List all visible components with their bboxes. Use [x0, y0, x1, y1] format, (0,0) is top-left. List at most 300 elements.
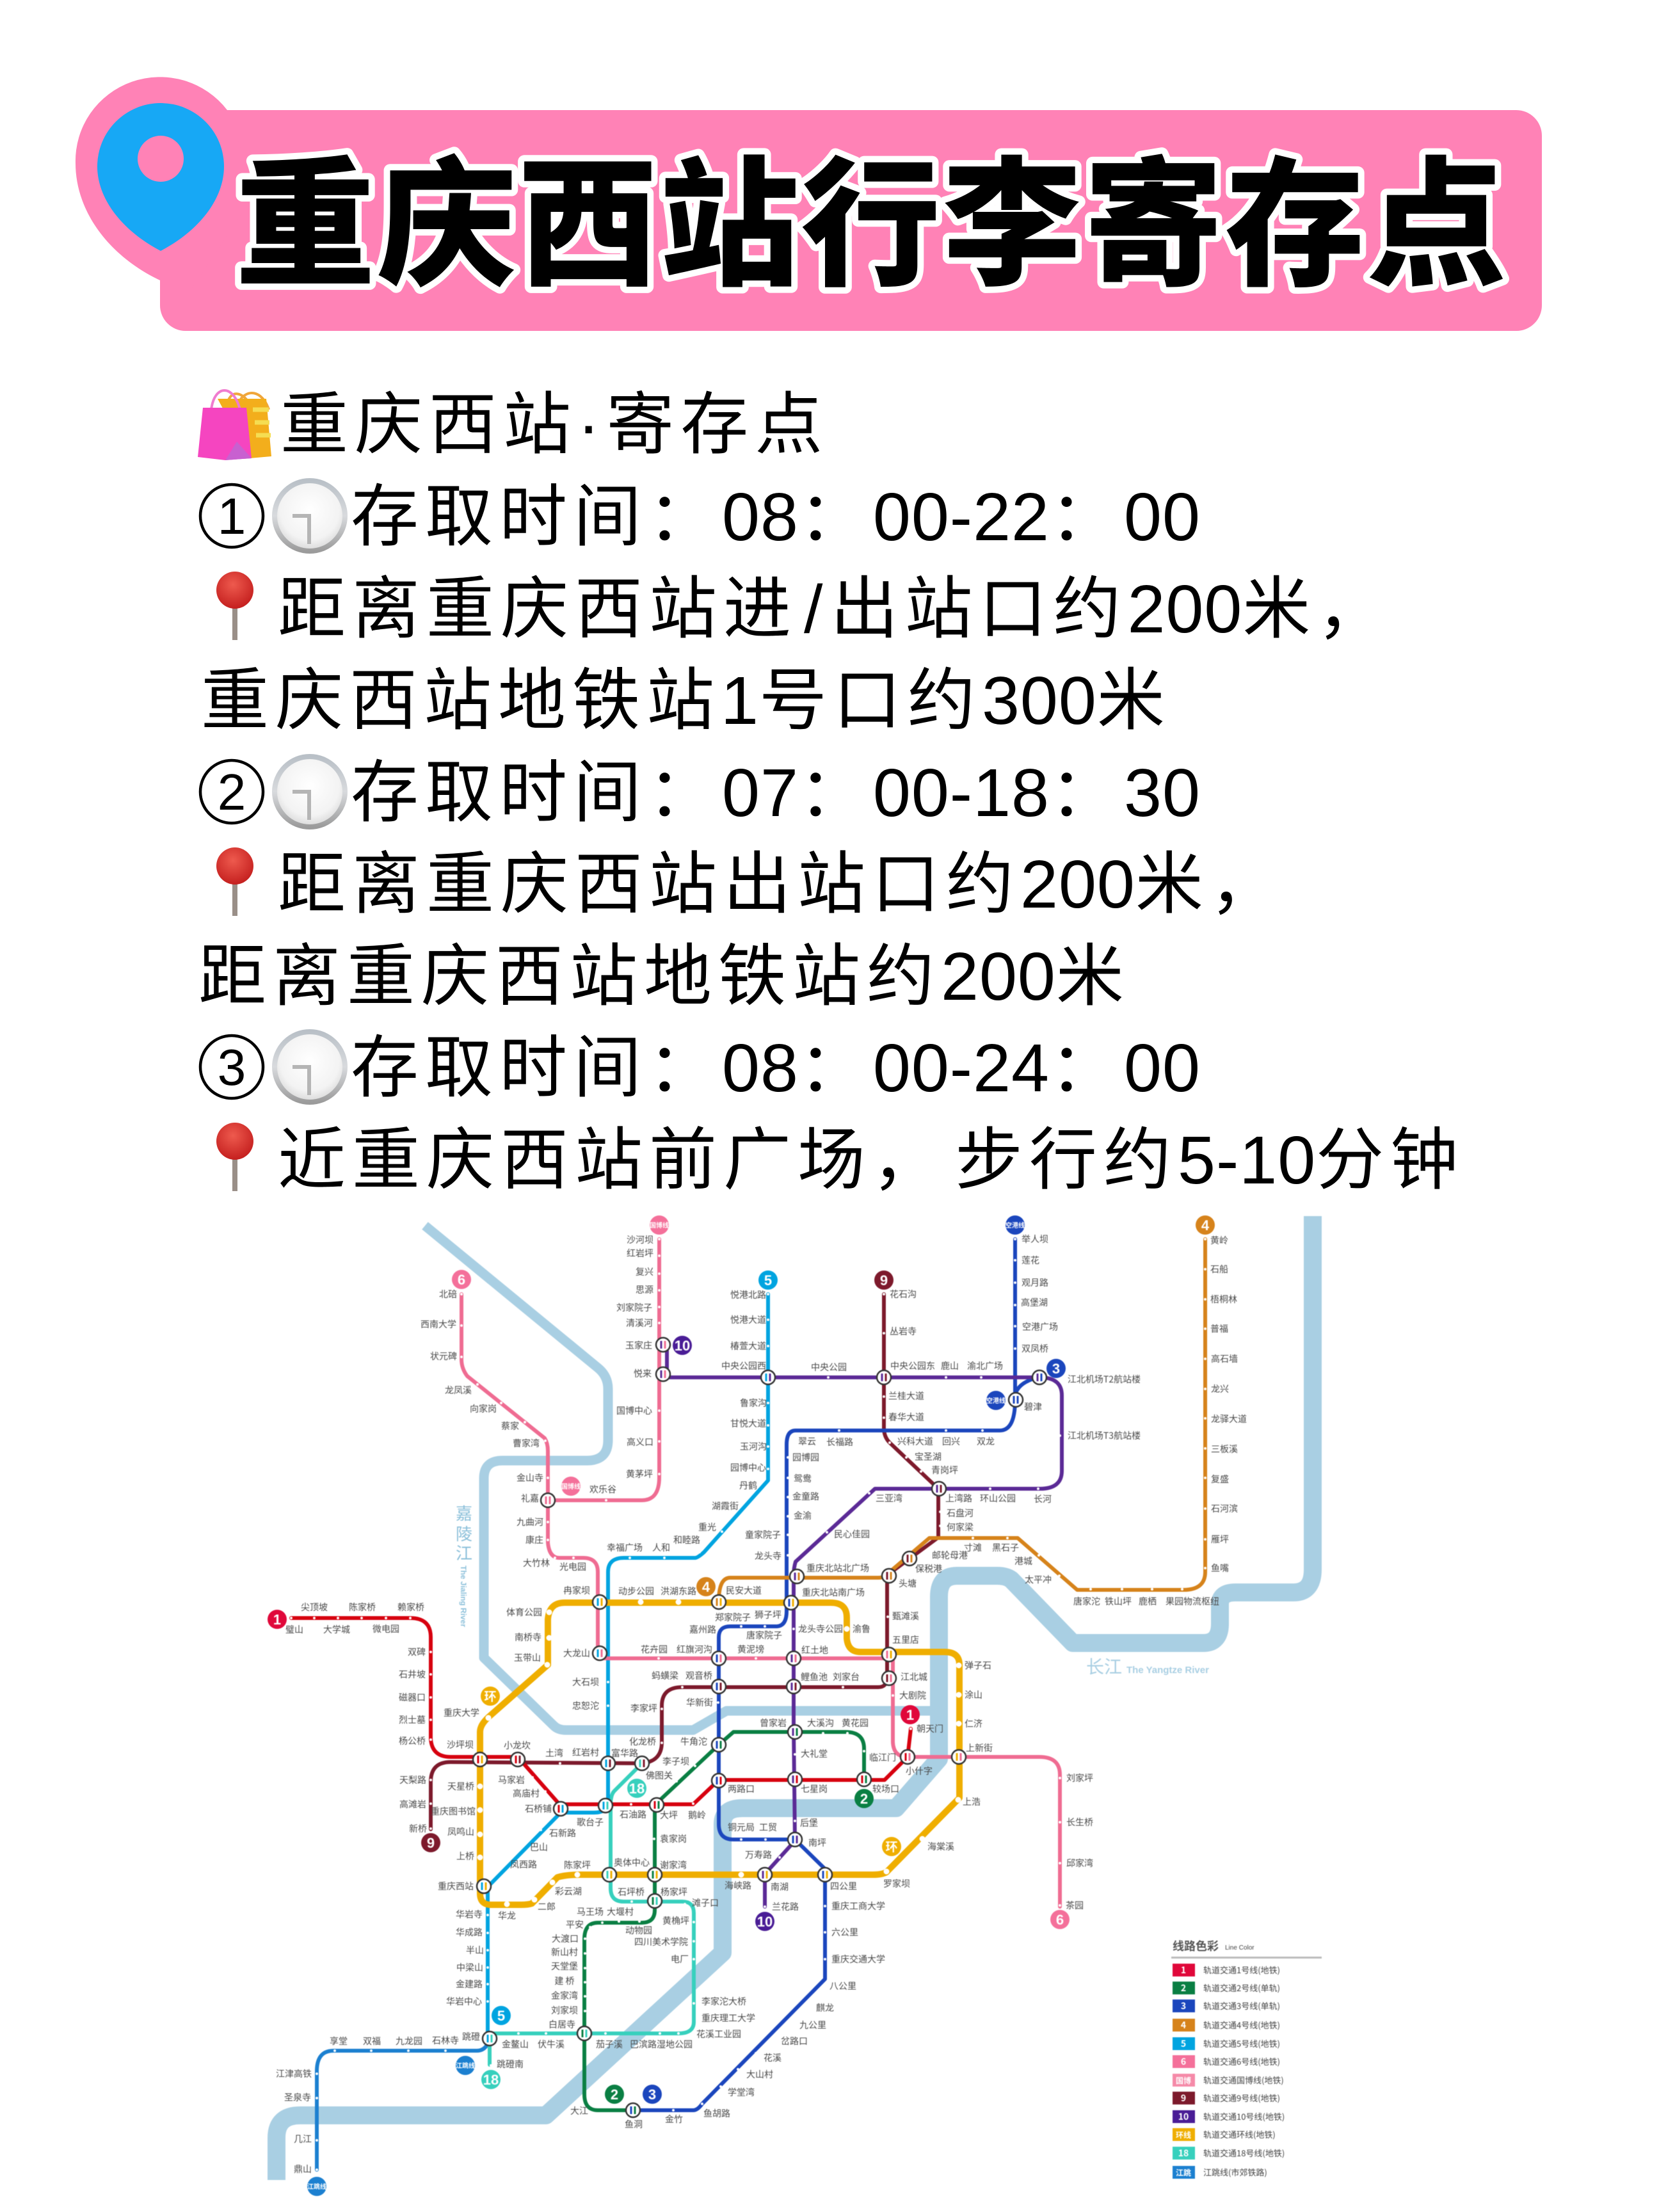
station labels: 磁器口: [399, 1691, 426, 1704]
station labels: 悦港大道: [730, 1313, 766, 1326]
legend: line colours: 轨道交通18号线(地铁): [1203, 2147, 1285, 2159]
station labels: 赖家桥: [397, 1601, 424, 1614]
station dots: [291, 1239, 1205, 2170]
legend: line colours: 轨道交通环线(地铁): [1203, 2128, 1276, 2140]
station labels: 礼嘉: [521, 1492, 539, 1505]
station labels: 江北机场T2航站楼: [1068, 1373, 1141, 1386]
legend: line colours: 5: [1181, 2037, 1186, 2050]
legend: line colours: 轨道交通10号线(地铁): [1203, 2110, 1285, 2122]
station labels: 大剧院: [899, 1689, 926, 1702]
station labels: 新桥: [409, 1822, 427, 1835]
station labels: 花溪工业园: [696, 2028, 741, 2040]
station labels: 渝北广场: [967, 1359, 1003, 1372]
station labels: 园博园: [792, 1451, 819, 1464]
station labels: 园博中心: [730, 1461, 766, 1474]
station labels: 复盛: [1211, 1473, 1229, 1486]
station labels: 黄岭: [1210, 1234, 1228, 1247]
station labels: 化龙桥: [629, 1735, 656, 1748]
station labels: 富华路: [611, 1747, 638, 1759]
station labels: 悦来: [634, 1367, 652, 1380]
station labels: 鲁家沟: [740, 1397, 767, 1409]
station labels: 长河: [1034, 1493, 1052, 1505]
station labels: 清溪河: [626, 1317, 653, 1329]
station labels: 铜元局: [728, 1821, 755, 1834]
station labels: 动物园: [625, 1924, 652, 1937]
line badges: 9: [427, 1835, 435, 1851]
station labels: 八公里: [830, 1980, 856, 1992]
line: 3: [633, 1239, 1015, 2110]
line badges: 5: [497, 2008, 505, 2024]
station labels: 跳磴: [462, 2030, 480, 2043]
line badges: 1: [906, 1707, 914, 1723]
station labels: 龙驿大道: [1211, 1413, 1247, 1425]
station labels: 金山寺: [517, 1471, 543, 1484]
station labels: 九公里: [799, 2019, 826, 2032]
station labels: 中央公园东: [890, 1359, 935, 1372]
station labels: 上湾路: [945, 1492, 972, 1505]
station labels: 龙头寺公园: [798, 1623, 843, 1635]
location 3 hours: 存取时间：08：00-24：00: [351, 1030, 1201, 1106]
station labels: 民安大道: [726, 1584, 762, 1597]
station labels: 双碑: [408, 1646, 426, 1658]
line: 18: [490, 1763, 694, 2065]
station labels: 黄花园: [842, 1717, 869, 1729]
station labels: 观月路: [1022, 1276, 1048, 1289]
river label: Yangtze: 长江: [1086, 1653, 1122, 1679]
station labels: 跳磴南: [497, 2058, 524, 2071]
river label: Jialing: 陵: [456, 1521, 472, 1545]
station labels: 工贸: [759, 1821, 777, 1834]
station labels: 石林寺: [432, 2034, 459, 2047]
station labels: 回兴: [942, 1435, 960, 1448]
legend: line colours: 轨道交通6号线(地铁): [1203, 2055, 1280, 2067]
icon: shopping bags: [198, 390, 271, 460]
station labels: 鸳鸯: [794, 1472, 812, 1485]
station labels: 鱼胡路: [703, 2107, 730, 2120]
station labels: 高滩岩: [399, 1798, 426, 1811]
legend: line colours: 轨道交通9号线(地铁): [1203, 2092, 1280, 2104]
station labels: 谢家湾: [660, 1859, 687, 1871]
legend: line colours: 18: [1178, 2147, 1189, 2160]
station labels: 陈家桥: [349, 1601, 376, 1614]
station labels: 太平冲: [1025, 1573, 1052, 1586]
station labels: 石油路: [620, 1808, 646, 1821]
location 1 hours: 存取时间：08：00-22：00: [351, 479, 1201, 555]
station labels: 观音桥: [685, 1669, 712, 1682]
station labels: 金童路: [792, 1490, 819, 1503]
station labels: 沙河坝: [627, 1233, 653, 1246]
line: 2: [584, 1732, 864, 2110]
station labels: 三板溪: [1211, 1443, 1238, 1455]
station labels: 重庆理工大学: [701, 2012, 755, 2024]
station labels: 较场口: [872, 1783, 899, 1795]
station labels: 新山村: [551, 1946, 578, 1959]
line: 10: [663, 1345, 1062, 1907]
title text: 重庆西站行李寄存点: [236, 112, 1506, 314]
station labels: 金家湾: [551, 1989, 578, 2002]
station labels: 重庆交通大学: [831, 1953, 885, 1966]
storage information text: [198, 387, 1464, 1198]
station labels: 中央公园西: [721, 1359, 766, 1372]
station labels: 临江门: [869, 1751, 896, 1764]
station labels: 双龙: [977, 1435, 995, 1448]
station labels: 重光: [698, 1521, 716, 1534]
station labels: 人和: [652, 1541, 670, 1554]
station labels: 体育公园: [506, 1606, 542, 1619]
station labels: 甄滩溪: [892, 1610, 919, 1623]
line badges: 1: [273, 1612, 281, 1628]
station labels: 七星岗: [801, 1783, 828, 1795]
legend title: Line Color: [1225, 1944, 1254, 1952]
line: 9: [431, 1294, 938, 1829]
legend: line colours: 轨道交通国博线(地铁): [1203, 2074, 1284, 2086]
station labels: 高堡湖: [1021, 1296, 1048, 1309]
station labels: 保税港: [915, 1562, 942, 1575]
line: Guobo: [548, 1239, 659, 1500]
station labels: 蚂蟥梁: [652, 1669, 678, 1682]
legend title: 线路色彩: [1173, 1937, 1219, 1954]
station labels: 黄桷坪: [662, 1914, 689, 1927]
line badges: 2: [860, 1791, 868, 1807]
line: 5: [488, 1294, 768, 2039]
Jialing river: [425, 1226, 939, 1730]
legend: line colours: 轨道交通3号线(单轨): [1203, 2000, 1280, 2012]
legend: line colours: 国博: [1176, 2075, 1191, 2086]
station labels: 仁济: [965, 1717, 982, 1730]
station labels: 港城: [1014, 1555, 1032, 1567]
station labels: 海峡路: [725, 1879, 751, 1892]
station labels: 果园物流枢纽: [1166, 1595, 1219, 1608]
station labels: 杨家坪: [661, 1886, 687, 1898]
legend: line colours: 1: [1181, 1964, 1186, 1976]
station labels: 郑家院子: [715, 1611, 751, 1624]
legend: line colours: 轨道交通2号线(单轨): [1203, 1982, 1280, 1994]
station labels: 鲤鱼池: [801, 1671, 828, 1683]
station labels: 石船: [1210, 1263, 1228, 1276]
station labels: 北碚: [439, 1288, 457, 1301]
station labels: 甘悦大道: [730, 1417, 766, 1430]
station labels: 两路口: [728, 1783, 755, 1795]
line: 4: [719, 1239, 1205, 1601]
station labels: 刘家坪: [1066, 1772, 1093, 1784]
station labels: 中央公园: [811, 1361, 847, 1374]
station labels: 小什字: [906, 1765, 933, 1777]
station labels: 大礼堂: [801, 1747, 828, 1760]
legend: line colours: 轨道交通1号线(地铁): [1203, 1964, 1280, 1976]
station labels: 龙兴: [1211, 1382, 1229, 1395]
station labels: 黑石子: [992, 1541, 1019, 1554]
station labels: 雁坪: [1211, 1533, 1229, 1546]
station labels: 土湾: [545, 1747, 563, 1759]
station labels: 宝圣湖: [915, 1450, 942, 1463]
station labels: 华岩中心: [446, 1995, 482, 2008]
legend: line colours: 轨道交通5号线(地铁): [1203, 2037, 1280, 2049]
location 2 distance line 2: 距离重庆西站地铁站约200米: [198, 939, 1130, 1014]
station labels: 童家院子: [745, 1528, 781, 1541]
station labels: 和睦路: [673, 1534, 700, 1546]
line badges: 环: [885, 1841, 898, 1854]
station labels: 重庆西站: [438, 1880, 474, 1893]
line badges: 10: [757, 1914, 773, 1930]
station labels: 石井坡: [399, 1668, 426, 1681]
station labels: 动步公园: [618, 1585, 654, 1598]
station labels: 刘家坝: [551, 2004, 578, 2017]
station labels: 天星桥: [447, 1780, 474, 1793]
station labels: 曾家岩: [760, 1717, 787, 1729]
station labels: 向家岗: [470, 1402, 497, 1415]
station labels: 兴科大道: [897, 1435, 933, 1448]
station labels: 红土地: [801, 1644, 828, 1656]
banner background: [160, 110, 1542, 331]
station labels: 大江: [570, 2104, 588, 2117]
legend title: [1173, 1937, 1254, 1954]
station labels: 兰花路: [772, 1900, 799, 1913]
station labels: 烈士墓: [399, 1713, 426, 1726]
station labels: 袁家岗: [660, 1832, 687, 1845]
station labels: 佛图关: [646, 1769, 673, 1782]
station labels: 天梨路: [399, 1774, 426, 1786]
station labels: 刘家院子: [616, 1301, 652, 1314]
line badges: 3: [1052, 1361, 1060, 1377]
station labels: 建 桥: [554, 1975, 575, 1987]
station labels: 小龙坎: [504, 1739, 531, 1752]
station labels: 李家沱大桥: [701, 1995, 746, 2008]
station labels: 南桥寺: [515, 1631, 541, 1644]
river label: Jialing: 江: [456, 1541, 472, 1564]
station labels: 民心佳园: [834, 1528, 870, 1541]
station labels: 沙坪坝: [447, 1738, 474, 1751]
line badges: 空港线: [1006, 1221, 1025, 1230]
station labels: [276, 1233, 1247, 2176]
station labels: 兰桂大道: [888, 1390, 924, 1402]
line badges: 江跳线: [456, 2062, 475, 2070]
station labels: 鹿山: [941, 1359, 959, 1372]
station labels: 长福路: [826, 1436, 853, 1448]
station labels: 万寿路: [745, 1848, 772, 1861]
station labels: 龙头寺: [755, 1550, 781, 1562]
station labels: 海棠溪: [927, 1840, 954, 1853]
station labels: 丛岩寺: [890, 1325, 917, 1338]
heading line: 重庆西站·寄存点: [280, 387, 829, 463]
location 1 distance: 距离重庆西站进/出站口约200米，: [278, 572, 1391, 647]
line: 1: [291, 1618, 911, 1804]
station labels: 红岩坪: [627, 1247, 653, 1260]
station labels: 高义口: [627, 1436, 653, 1448]
station labels: 四公里: [830, 1880, 857, 1893]
station labels: 江北城: [901, 1671, 927, 1683]
station labels: 朝天门: [917, 1722, 943, 1735]
station labels: 椿萱大道: [730, 1340, 766, 1352]
station labels: 石桥铺: [525, 1802, 552, 1815]
station labels: 江津高铁: [276, 2067, 312, 2080]
station labels: 思源: [636, 1283, 653, 1296]
station labels: 长生桥: [1066, 1816, 1093, 1829]
interchange stations: [473, 1338, 1046, 2117]
station labels: 江北机场T3航站楼: [1068, 1429, 1141, 1442]
station labels: 伏牛溪: [538, 2038, 565, 2051]
station labels: 青岗坪: [931, 1464, 958, 1477]
station labels: 凤西路: [510, 1858, 537, 1871]
river label: Yangtze: [1086, 1653, 1209, 1679]
location 3 hours: 3: [218, 1039, 246, 1096]
station labels: 鹅岭: [688, 1809, 706, 1822]
station labels: 微电园: [373, 1623, 399, 1635]
station labels: 巴山: [530, 1841, 548, 1854]
metro lines: [291, 1239, 1205, 2170]
line badges: 国博线: [650, 1221, 669, 1230]
station labels: 五里店: [892, 1633, 919, 1646]
line badges: 10: [675, 1338, 690, 1354]
station labels: 欢乐谷: [589, 1483, 616, 1496]
loop line station dots: [480, 1602, 959, 1904]
station labels: 鼎山: [294, 2163, 312, 2176]
Yangtze river: [276, 1216, 1313, 2180]
station labels: 南坪: [808, 1836, 826, 1849]
station labels: 圣泉寺: [284, 2091, 311, 2104]
line badges: 3: [648, 2087, 656, 2103]
station labels: 大坪: [660, 1809, 678, 1822]
rivers: [276, 1216, 1313, 2180]
line badges: 5: [764, 1272, 772, 1288]
station labels: 大竹林: [523, 1557, 550, 1569]
station labels: 鱼洞: [625, 2118, 643, 2131]
line badges: 18: [629, 1781, 645, 1797]
station labels: 滩子口: [692, 1896, 719, 1909]
station labels: 九曲河: [517, 1516, 543, 1528]
line badges: 环: [484, 1690, 497, 1704]
station labels: 重庆图书馆: [431, 1805, 476, 1818]
legend: line colours: 环线: [1176, 2129, 1191, 2140]
station labels: 杨公桥: [399, 1735, 426, 1747]
station labels: 彩云湖: [555, 1885, 582, 1898]
station labels: 悦港北路: [730, 1288, 766, 1301]
station labels: 华成路: [456, 1926, 483, 1939]
station labels: 春华大道: [888, 1411, 924, 1423]
station labels: 弹子石: [965, 1659, 991, 1672]
station labels: 二郎: [538, 1900, 556, 1913]
station labels: 双福: [363, 2035, 381, 2048]
station labels: 湖霞街: [712, 1500, 739, 1512]
station labels: 学堂湾: [728, 2086, 755, 2099]
station labels: 铁山坪: [1105, 1595, 1132, 1608]
line badges: 江跳线: [307, 2183, 326, 2191]
station labels: 华龙: [498, 1909, 516, 1922]
station labels: 牛角沱: [680, 1735, 707, 1748]
station labels: 西南大学: [421, 1318, 456, 1331]
legend: line colours: 10: [1178, 2110, 1189, 2123]
station labels: 后堡: [800, 1816, 818, 1829]
line: 3 branch: [1015, 1377, 1038, 1395]
line: 6: [461, 1294, 1060, 1907]
river label: Yangtze: The Yangtze River: [1126, 1665, 1209, 1676]
station labels: 玉带山: [514, 1651, 541, 1664]
location 1 distance line 2: 重庆西站地铁站1号口约300米: [201, 663, 1171, 739]
line badges: 4: [702, 1579, 710, 1595]
station labels: 康庄: [525, 1534, 543, 1546]
station labels: 石河滨: [1211, 1502, 1238, 1515]
station labels: 嘉州路: [689, 1623, 716, 1636]
station labels: 状元碑: [430, 1350, 457, 1363]
station labels: 茶园: [1066, 1899, 1084, 1912]
station labels: 黄茅坪: [626, 1468, 653, 1480]
station labels: 普福: [1210, 1322, 1228, 1335]
river label: Jialing: The Jialing River: [459, 1566, 468, 1627]
legend: line colours: 2: [1181, 1982, 1186, 1994]
river label: Jialing: 嘉: [456, 1501, 472, 1525]
station labels: 重庆北站北广场: [806, 1562, 869, 1575]
location 2 distance: 距离重庆西站出站口约200米，: [278, 847, 1284, 922]
station labels: 鹿栖: [1139, 1595, 1157, 1608]
station labels: 头塘: [899, 1577, 917, 1590]
station labels: 六公里: [831, 1926, 858, 1939]
station labels: 三亚湾: [876, 1492, 902, 1505]
station labels: 享堂: [330, 2035, 348, 2048]
station labels: 金建路: [456, 1978, 483, 1991]
legend: line colours: 3: [1181, 2000, 1186, 2012]
station labels: 四川美术学院: [634, 1936, 688, 1948]
station labels: 碧津: [1024, 1400, 1042, 1413]
station labels: 红旗河沟: [677, 1643, 712, 1656]
station labels: 上新街: [966, 1742, 993, 1754]
station labels: 龙凤溪: [445, 1384, 472, 1397]
station labels: 罗家坝: [883, 1877, 910, 1890]
station labels: 李家坪: [630, 1702, 657, 1715]
location 2 hours: 存取时间：07：00-18：30: [351, 755, 1201, 831]
line: Jiangtiao: [317, 2039, 490, 2170]
station labels: 刘家台: [833, 1671, 860, 1683]
station labels: 几江: [294, 2133, 312, 2145]
station labels: 梧桐林: [1210, 1293, 1237, 1306]
line badges: 9: [880, 1272, 888, 1288]
line badges: 6: [1056, 1912, 1064, 1928]
title text: 重庆西站行李寄存点: [236, 112, 1506, 314]
station labels: 复兴: [636, 1265, 653, 1278]
station labels: 华新街: [686, 1696, 713, 1709]
station labels: 九龙园: [396, 2035, 422, 2048]
station labels: 洪湖东路: [661, 1585, 696, 1598]
station labels: 环山公园: [980, 1492, 1016, 1505]
station labels: 翠云: [798, 1435, 816, 1448]
station labels: 何家梁: [947, 1521, 974, 1534]
legend: line colours: 江跳: [1176, 2167, 1191, 2178]
station labels: 莲花: [1022, 1254, 1039, 1267]
station labels: 大龙山: [563, 1647, 590, 1660]
icon: location pin: [76, 77, 256, 288]
station labels: 曹家湾: [513, 1437, 540, 1450]
station labels: 光电园: [559, 1560, 586, 1573]
station labels: 大渡口: [552, 1932, 579, 1945]
station labels: 涂山: [965, 1688, 982, 1701]
station labels: 大堰村: [607, 1905, 634, 1918]
legend: line colours: 4: [1181, 2019, 1186, 2032]
station labels: 金渝: [794, 1509, 812, 1522]
station labels: 马家岩: [498, 1774, 525, 1786]
legend: line colours: 江跳线(市郊铁路): [1203, 2166, 1267, 2178]
line badges: 国博线: [561, 1482, 581, 1491]
station labels: 花溪: [764, 2051, 781, 2064]
station labels: 马王场: [577, 1905, 604, 1918]
legend: line colours: [1171, 1937, 1322, 2179]
station labels: 狮子坪: [755, 1608, 781, 1621]
station labels: 凤鸣山: [447, 1825, 474, 1838]
station labels: 玉家庄: [625, 1339, 652, 1352]
station labels: 歌台子: [577, 1816, 604, 1829]
station labels: 岔路口: [781, 2035, 808, 2048]
station labels: 黄泥塝: [737, 1643, 764, 1656]
title banner: [76, 77, 1542, 331]
station labels: 寸滩: [964, 1541, 982, 1554]
station labels: 华岩寺: [456, 1908, 483, 1921]
